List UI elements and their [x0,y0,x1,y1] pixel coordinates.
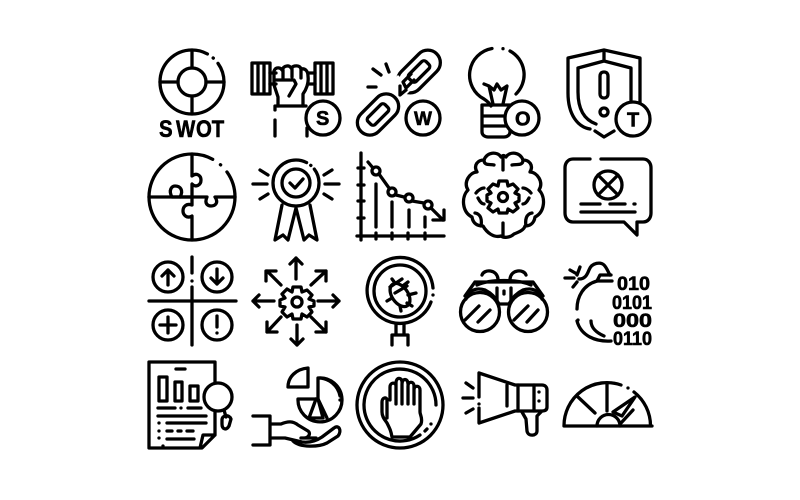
icon: stop hand in circle [357,362,443,448]
icon: gear with radiating arrows [253,258,339,345]
strength letter: S [316,108,329,130]
SWOT label: SWOT [159,115,225,142]
icon: brain with gear [463,153,544,237]
icon: quality ribbon badge [253,160,339,240]
icon: bomb with binary code: 0110 [613,329,652,350]
icon: bomb with binary code: 000 [613,311,652,332]
icon: declining line chart [357,153,444,240]
icon: SWOT matrix quadrants [149,257,236,345]
binary digits: 010 [617,274,650,295]
icon: bomb with binary code: 0101 [612,293,652,314]
threat letter: T [627,110,639,132]
icon: opportunity light bulb [470,48,539,137]
icon: gauge meter [564,383,652,426]
opportunity letter: O [515,108,531,130]
icon: megaphone [463,373,547,435]
icon: binoculars [460,271,548,332]
icon: hand holding pie chart [253,368,342,446]
icon: SWOT target [159,50,225,142]
icon: puzzle circle [149,154,235,240]
icon: bug under magnifier [367,257,433,345]
icon: bomb with binary code [565,263,652,350]
icon: threat shield [568,50,650,137]
icon: strength dumbbell fist [252,63,340,136]
icon: weakness broken chain [352,45,446,140]
weakness letter: W [414,109,432,130]
icon: report with magnifier [149,362,232,448]
icon: error speech bubble [565,159,651,235]
